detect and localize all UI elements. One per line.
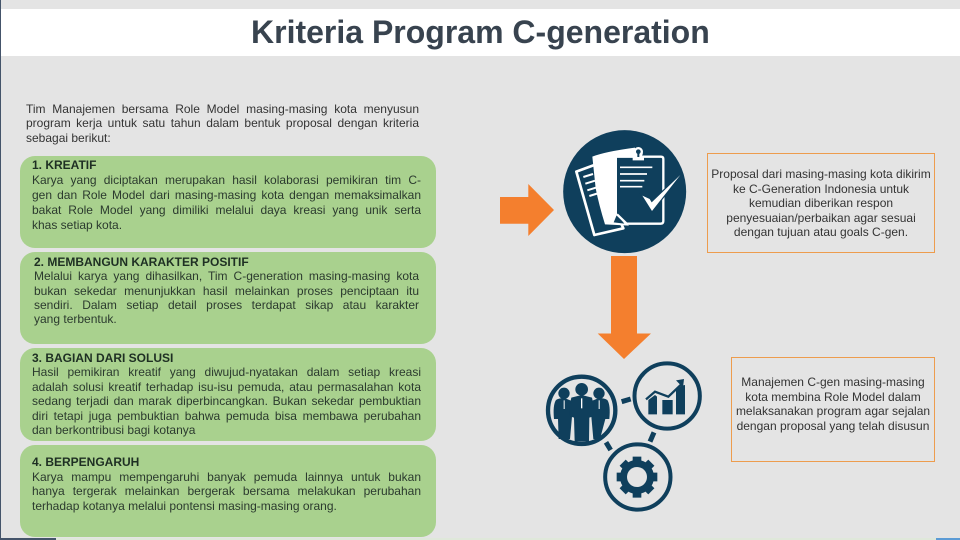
panel: 1 kreatif	[20, 156, 436, 248]
text: karakter	[34, 269, 419, 326]
text: karakter: Melalui karya yang dihasilkan, Tim C-generation masing-masing kota	[34, 269, 419, 283]
chart circle	[634, 363, 700, 429]
intro text	[26, 102, 419, 145]
text: solusi: dan berkontribusi bagi kotanya	[32, 423, 195, 437]
icon: team, chart and gear	[546, 361, 702, 512]
bottom strip	[0, 538, 960, 540]
heading: kreatif: 1. KREATIF	[32, 158, 96, 172]
text: berpengaruh: Karya mampu mempengaruhi banyak pemuda lainnya untuk bukan	[32, 470, 421, 484]
callout: management: dengan proposal yang telah disusun	[737, 418, 929, 432]
bottom left tab	[0, 538, 56, 540]
text: kreatif: gen dan Role Model dari masing-masing kota dengan memaksimalkan	[32, 188, 421, 202]
text: kreatif: Karya yang diciptakan merupakan hasil kolaborasi pemikiran tim C-	[32, 173, 421, 187]
panel: 4 berpengaruh	[20, 445, 436, 537]
callout: proposal	[707, 153, 935, 253]
callout: management: kota membina Role Model dalam	[745, 390, 921, 404]
callout: proposal: penyesuaian/perbaikan agar sesuai	[726, 210, 916, 224]
title band	[1, 9, 960, 56]
heading: berpengaruh: 4. BERPENGARUH	[32, 455, 139, 469]
title: Kriteria Program C-generation	[251, 14, 710, 50]
heading: karakter: 2. MEMBANGUN KARAKTER POSITIF	[34, 255, 249, 269]
gear circle	[605, 444, 670, 510]
connectors	[606, 399, 654, 450]
intro text: program kerja untuk satu tahun dalam bentuk proposal dengan kriteria	[26, 116, 419, 130]
panel: 3 bagian dari solusi	[20, 348, 436, 441]
text: solusi: diri tetapi juga pembuktian bahwa pemuda bisa membawa perubahan	[32, 409, 421, 423]
text: berpengaruh	[32, 470, 421, 513]
text: karakter: sendiri. Dalam setiap detail proses terdapat sikap atau karakter	[34, 298, 419, 312]
text: kreatif: khas setiap kota.	[32, 218, 122, 232]
text: solusi	[32, 365, 421, 437]
callout: management: Manajemen C-gen masing-masing	[741, 375, 925, 389]
text: solusi: Hasil pemikiran kreatif yang diwujud-nyatakan dalam setiap kreasi	[32, 365, 421, 379]
callout: proposal: dengan tujuan atau goals C-gen.	[734, 225, 908, 239]
text: solusi: adalah solusi kreatif terhadap isu-isu pemuda, atau permasalahan kota	[32, 380, 421, 394]
text: karakter: bukan sekedar menunjukkan hasil melainkan proses penciptaan itu	[34, 284, 419, 298]
panel: 2 membangun karakter positif	[20, 252, 436, 344]
intro text: sebagai berikut:	[26, 131, 111, 145]
icon: documents with checkmark	[563, 130, 686, 254]
text: karakter: yang terbentuk.	[34, 312, 117, 326]
text: solusi: sedang terjadi dan marak diperbincangkan. Bukan sekedar pembuktian	[32, 394, 421, 408]
left edge bar	[0, 0, 1, 540]
team circle	[548, 377, 615, 444]
bottom right tab	[936, 538, 960, 540]
arrow: down	[598, 256, 651, 359]
heading: solusi: 3. BAGIAN DARI SOLUSI	[32, 351, 173, 365]
callout: proposal: kemudian diberikan respon	[749, 196, 893, 210]
text: kreatif	[32, 173, 421, 232]
text: berpengaruh: terhadap kotanya melalui pontensi masing-masing orang.	[32, 499, 337, 513]
intro text: Tim Manajemen bersama Role Model masing-masing kota menyusun	[26, 102, 419, 116]
callout: management: melaksanakan program agar sejalan	[736, 404, 930, 418]
arrow: right	[500, 184, 554, 236]
callout: proposal: ke C-Generation Indonesia untuk	[733, 182, 909, 196]
callout: proposal: Proposal dari masing-masing kota dikirim	[711, 167, 931, 181]
text: kreatif: bakat Role Model yang dimiliki melalui daya kreasi yang unik serta	[32, 203, 421, 217]
callout: management	[731, 357, 935, 462]
text: berpengaruh: hanya tergerak melainkan bergerak bersama melakukan perubahan	[32, 484, 421, 498]
